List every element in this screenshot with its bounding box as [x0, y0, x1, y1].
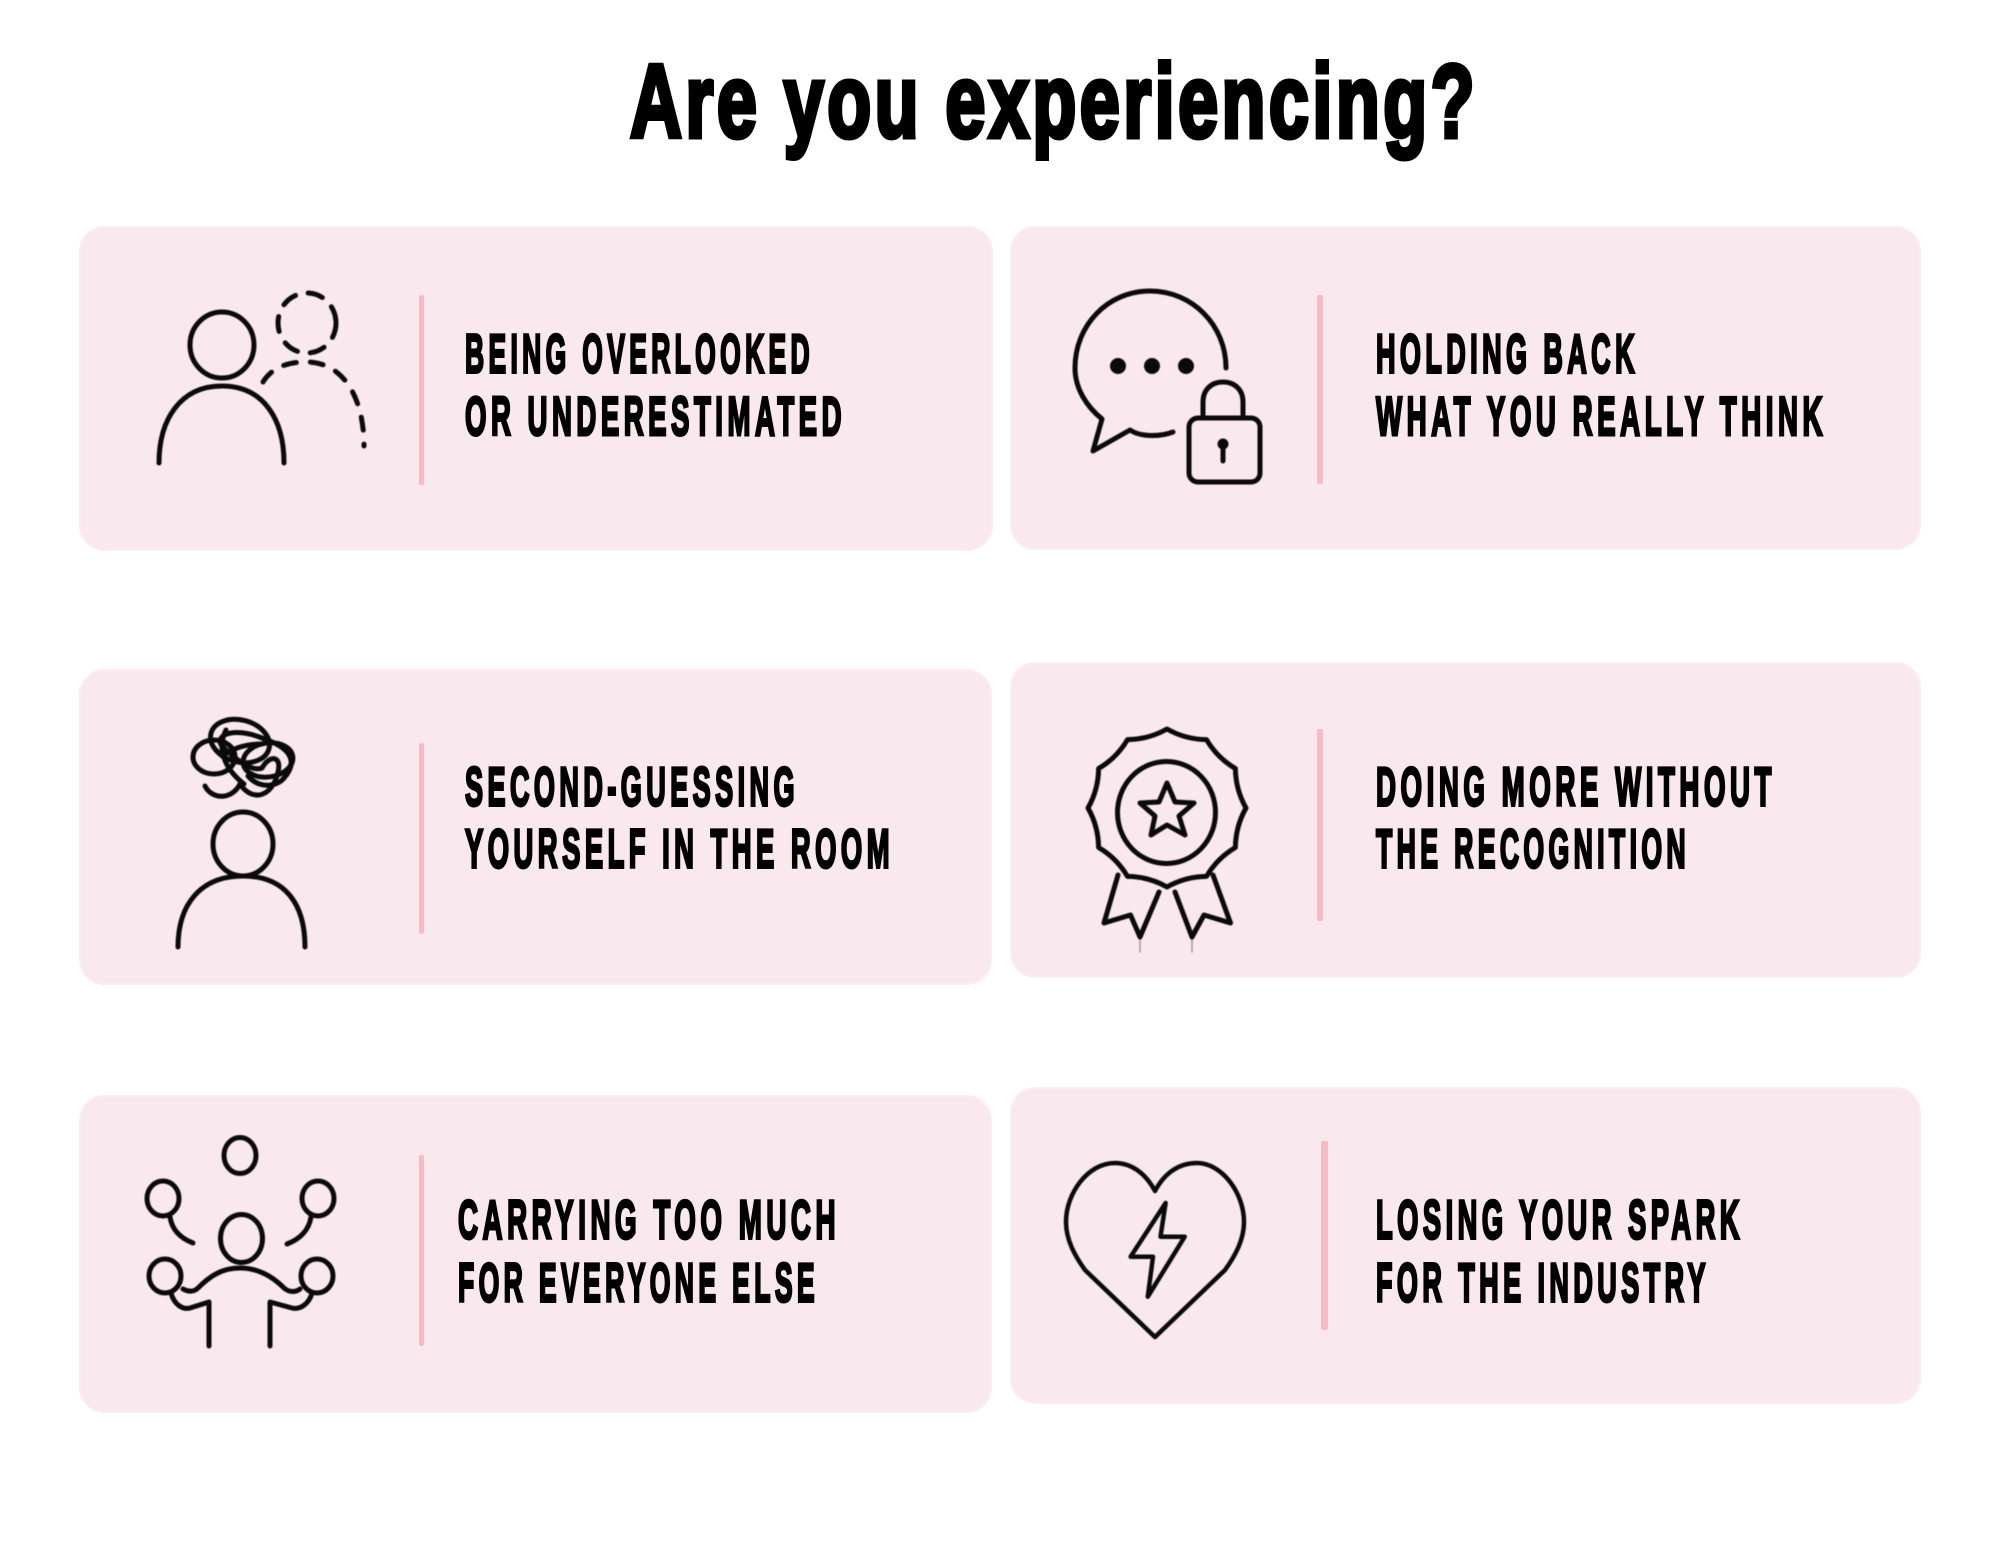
divider	[1321, 1141, 1328, 1330]
text: second-guessing	[465, 756, 894, 880]
text: being overlooked	[465, 322, 846, 447]
divider	[1317, 295, 1323, 484]
text: carrying too much	[458, 1188, 840, 1314]
icon: heart with lightning bolt	[1066, 1163, 1244, 1337]
icon: person with tangled thoughts	[178, 713, 305, 947]
text: losing your spark	[1376, 1188, 1744, 1314]
text: second-guessing: SECOND-GUESSING	[465, 756, 799, 818]
text: doing more	[1376, 756, 1776, 880]
panel: doing more	[1011, 663, 1920, 977]
divider	[419, 1155, 424, 1346]
text: holding back	[1376, 322, 1827, 447]
panel: second-guessing: YOURSELF IN THE ROOM	[465, 818, 894, 880]
text: carrying too much: CARRYING TOO MUCH	[458, 1188, 840, 1250]
icon: award rosette	[1088, 729, 1246, 952]
text: being overlooked: BEING OVERLOOKED	[465, 322, 814, 384]
divider	[419, 295, 424, 485]
panel: second-guessing	[80, 670, 991, 984]
panel: being overlooked	[80, 227, 992, 550]
panel: holding back	[1011, 227, 1920, 549]
text: being overlooked: OR UNDERESTIMATED	[465, 385, 846, 447]
text: carrying too much: FOR EVERYONE ELSE	[458, 1252, 819, 1314]
panel: carrying too much	[80, 1096, 991, 1412]
icon: person with dashed shadow person	[159, 293, 364, 463]
icon: juggling person	[147, 1138, 334, 1346]
title: Are you experiencing?	[630, 44, 1478, 160]
divider	[419, 743, 424, 934]
text: holding back: HOLDING BACK	[1376, 322, 1639, 384]
panel: losing your spark	[1011, 1088, 1920, 1403]
divider	[1317, 729, 1323, 921]
icon: speech bubble with padlock	[1075, 291, 1260, 482]
